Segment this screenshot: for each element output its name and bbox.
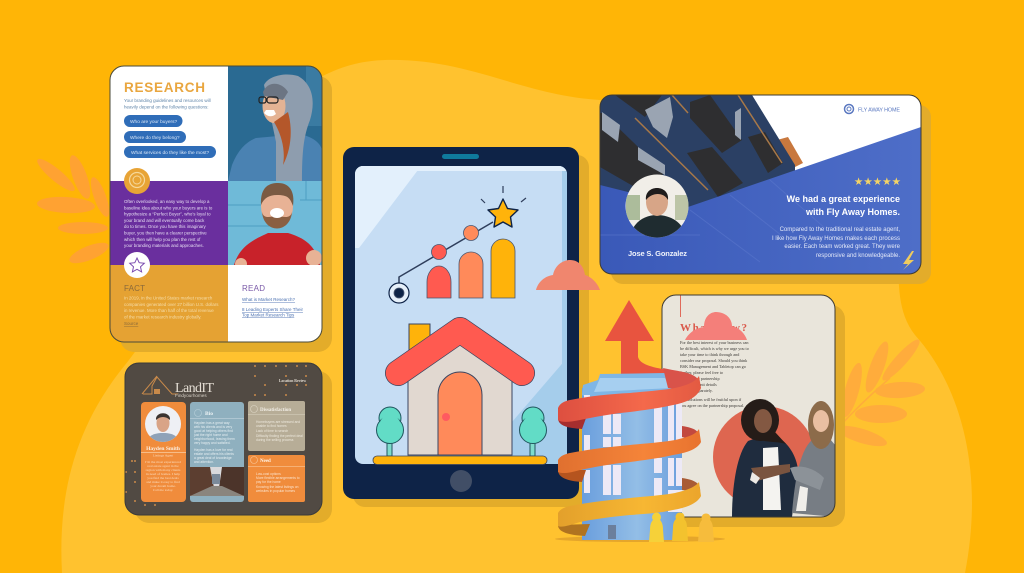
testimonial body <box>772 227 901 259</box>
profile panel: you find the best deals <box>147 476 179 480</box>
panel: purple text block: baseline idea about who your buyers are is to <box>124 205 213 210</box>
tablet speaker <box>442 154 479 159</box>
bio panel: with his clients and is very <box>194 425 232 429</box>
need panel: Need <box>260 459 271 464</box>
research intro text <box>124 98 211 110</box>
LandIT card border <box>125 363 322 515</box>
customer name: Jose S. Gonzalez <box>628 249 687 258</box>
proposal body text: attached separately. <box>680 388 713 393</box>
bio panel: very happy and satisfied. <box>194 441 231 445</box>
growth arrow <box>605 300 690 385</box>
LandIT logo: Findyourhomes <box>175 393 207 398</box>
profile panel <box>141 402 186 502</box>
need panel: Low-cost options <box>256 472 281 476</box>
icon: pink cloud <box>685 312 747 340</box>
bio panel: a great deal of knowledge <box>194 456 232 460</box>
card shadows <box>120 76 931 527</box>
research intro text: Your branding guidelines and resources will <box>124 98 211 103</box>
bio panel: just the right home and <box>193 433 228 437</box>
proposal body text: you agree on the partnership proposal. <box>680 403 744 408</box>
bio panel: Bio <box>205 411 213 417</box>
icon: growth chart <box>389 186 526 303</box>
heading: research: RESEARCH <box>124 80 205 95</box>
testimonial body: responsive and knowledgeable. <box>816 253 900 259</box>
testimonial headline <box>787 194 900 217</box>
need panel: More flexible arrangements to <box>256 476 300 480</box>
panel: purple text block: buyer, you then have a clearer perspective <box>124 230 207 236</box>
icon: target <box>124 168 150 194</box>
right leaf decoration <box>835 336 925 450</box>
photo: city street <box>190 467 244 496</box>
demographics panel: Lack of time to search <box>256 429 288 433</box>
need panel: websites in popular homes <box>256 489 295 493</box>
panel: proposal card <box>662 295 835 517</box>
question pills: Where do they belong? <box>130 135 180 141</box>
proposal body text: Our solutions will be fruitful upon if <box>680 397 742 402</box>
profile panel: Hayden Smith <box>146 446 180 452</box>
need panel: Knowing the latest listings on <box>256 485 299 489</box>
bio panel: neighborhood, leaving them <box>194 437 235 441</box>
bio panel <box>190 402 244 502</box>
photo: woman in hood <box>228 66 322 181</box>
brand logo: fly away home: FLY AWAY HOME <box>858 108 900 114</box>
customer avatar <box>626 174 689 238</box>
question pills <box>124 115 216 158</box>
panel: purple text block <box>110 181 228 265</box>
panel: purple text block: your branding materials and approaches. <box>124 243 204 248</box>
ground shadow <box>555 536 725 542</box>
ribbon: orange <box>558 426 701 482</box>
panel: testimonial card <box>600 95 921 274</box>
bio panel: good at helping others find <box>194 429 233 433</box>
ribbon: red <box>558 368 701 429</box>
avatar <box>145 406 181 445</box>
need panel: pay for the home <box>256 480 281 484</box>
proposal body text: consider our proposal. Should you think <box>680 358 748 363</box>
profile panel: your dream home. <box>150 484 176 488</box>
blue diagonal overlay <box>600 127 921 274</box>
demographics panel: Dissatisfaction <box>260 408 291 413</box>
research intro text: heavily depend on the following questions: <box>124 104 209 110</box>
panel: read: What is Market Research? <box>242 297 296 302</box>
testimonial headline: with Fly Away Homes. <box>805 207 900 217</box>
panel: fact: Source <box>124 321 139 326</box>
profile panel: I’m the most experienced <box>145 460 181 464</box>
panel: LandIT profile card <box>125 363 322 515</box>
building tower <box>582 373 682 540</box>
brand logo: fly away home <box>844 104 900 114</box>
panel: purple text block: which then will help you plan the rest of <box>124 237 201 242</box>
proposal body text: take your time to think through and <box>680 352 740 357</box>
proposal heading: What now? <box>680 322 747 334</box>
need panel <box>248 455 305 502</box>
photo: two businesswomen <box>732 399 835 517</box>
icon: right tree <box>520 407 546 456</box>
panel: purple text block: do to times. Once you have this imaginary <box>124 224 207 229</box>
house ground bar <box>373 456 547 464</box>
profile panel: Listings Agent <box>153 454 173 458</box>
decorative dots <box>125 365 307 506</box>
demographics panel: unable to find homes <box>256 424 287 428</box>
question pills: What services do they like the most? <box>131 150 209 156</box>
proposal body text: be difficult, which is why we urge you to <box>680 346 749 352</box>
profile panel: region with many clients <box>146 468 181 472</box>
tablet home button <box>450 470 472 492</box>
panel: fact: in revenue. More than half of the total revenue <box>124 308 214 313</box>
left leaf decoration <box>34 153 113 267</box>
panel: purple text block: hypothesize a “Perfect Buyer”, who’s loyal to <box>124 212 211 217</box>
demographics panel: Homebuyers are stressed and <box>256 420 300 424</box>
bio panel: and attention. <box>194 460 214 464</box>
LandIT logo: LandIT <box>175 381 214 396</box>
background blob <box>61 60 972 573</box>
icon: star badge <box>124 252 150 278</box>
testimonial body: Compared to the traditional real estate agent, <box>780 227 900 233</box>
testimonial body: I like how Fly Away Homes makes each process <box>772 236 900 242</box>
research card border <box>110 66 322 342</box>
profile panel: and make it easy to find <box>146 480 180 484</box>
bio panel: Hayden has a love for real <box>194 448 233 452</box>
demographics panel: during the selling process <box>256 438 294 442</box>
panel: read: 8 Leading Experts Share Their <box>242 307 303 312</box>
proposal body text: further, please feel free to <box>680 370 723 376</box>
bio panel: Hayden has a great way <box>194 421 230 425</box>
panel: fact: of the market research industry globally. <box>124 314 202 319</box>
proposal body text: compare Gantt details <box>680 382 717 387</box>
profile panel: Call me today. <box>153 488 173 492</box>
icon: house <box>398 324 522 455</box>
question pills: Who are your buyers? <box>130 119 178 125</box>
LandIT logo <box>142 376 306 398</box>
3D building with ribbons <box>555 368 725 542</box>
tablet screen <box>355 166 567 464</box>
photo: apartment building <box>600 96 803 207</box>
proposal body text: BSK Management and Tabletop can go <box>680 364 746 369</box>
rating stars: ★★★★★ <box>854 176 901 188</box>
panel: read <box>228 265 322 342</box>
panel: fact: companies generated over 27 billion U.S. dollars <box>124 302 219 307</box>
tablet <box>343 147 579 499</box>
testimonial card border <box>600 95 921 274</box>
proposal card border <box>662 295 835 517</box>
icon: peg figures <box>649 512 714 542</box>
icon: left tree <box>376 407 404 456</box>
profile panel: in need of homes. I help <box>146 472 180 476</box>
icon: coral cloud <box>536 260 600 290</box>
panel: purple text block: Often overlooked, an easy way to develop a <box>124 199 210 204</box>
demographics panel: Difficulty finding the perfect deal <box>256 434 303 438</box>
panel: fact <box>110 265 228 342</box>
ribbon: yellow <box>558 478 701 536</box>
demographics panel <box>248 401 305 451</box>
bio panel: estate and offers his clients <box>194 452 234 456</box>
panel: fact: FACT <box>124 284 145 293</box>
proposal body text: For the best interest of your business can <box>680 340 749 345</box>
testimonial headline: We had a great experience <box>787 194 900 204</box>
panel: read: Top Market Research Tips <box>242 312 295 318</box>
panel: research card <box>110 66 322 342</box>
red circle backdrop <box>713 407 812 498</box>
LandIT logo: Location Review <box>279 379 306 383</box>
icon: lightning bolt <box>903 251 914 270</box>
panel: purple text block: your brand and will eventually come back <box>124 218 205 223</box>
testimonial body: easier. Each team worked great. They were <box>784 244 901 250</box>
panel: read: READ <box>242 284 265 293</box>
panel: fact: In 2019, in the United States market research <box>124 296 213 300</box>
profile panel: real estate agent in the <box>147 464 179 468</box>
proposal body text: through our partnership <box>680 376 720 381</box>
proposal body text <box>680 340 749 408</box>
photo: laughing man <box>228 181 322 270</box>
faint building reflection <box>600 180 850 262</box>
